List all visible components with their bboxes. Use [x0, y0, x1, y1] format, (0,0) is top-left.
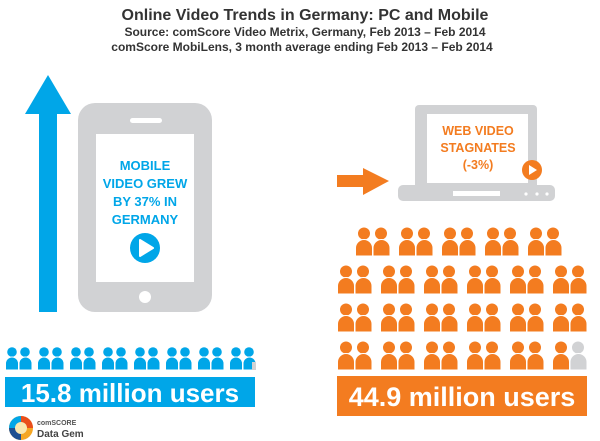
people: orange grid	[338, 228, 587, 370]
text: mobile growth	[103, 158, 188, 227]
arrow: blue up	[25, 75, 71, 312]
icon: laptop	[398, 105, 555, 201]
text: web video: STAGNATES	[440, 141, 516, 155]
subtitle: comScore MobiLens, 3 month average ending Feb 2013 – Feb 2014	[111, 40, 493, 54]
subtitle: Source: comScore Video Metrix, Germany, Feb 2013 – Feb 2014	[124, 25, 486, 39]
logo: comScore Data Gem: comSCORE	[37, 420, 77, 427]
icon: play orange	[522, 160, 542, 180]
people: blue row	[6, 347, 256, 370]
arrow: orange right	[337, 168, 389, 195]
bar: orange users	[337, 376, 587, 416]
logo: comScore Data Gem: Data Gem	[37, 429, 84, 440]
text: mobile growth: VIDEO GREW	[103, 176, 188, 191]
text: web video: (-3%)	[463, 158, 493, 172]
text: mobile growth: MOBILE	[120, 158, 171, 173]
text: web video	[440, 124, 516, 172]
icon: play blue	[130, 233, 160, 263]
subtitle	[111, 25, 493, 54]
title: Online Video Trends in Germany: PC and Mobile	[122, 7, 489, 24]
text: web video: WEB VIDEO	[442, 124, 514, 138]
bar: orange users: 44.9 million users	[349, 382, 575, 412]
bar: blue users: 15.8 million users	[21, 378, 239, 408]
text: mobile growth: GERMANY	[112, 212, 179, 227]
logo: comScore Data Gem	[9, 416, 84, 440]
text: mobile growth: BY 37% IN	[113, 194, 177, 209]
icon: phone	[78, 103, 212, 312]
